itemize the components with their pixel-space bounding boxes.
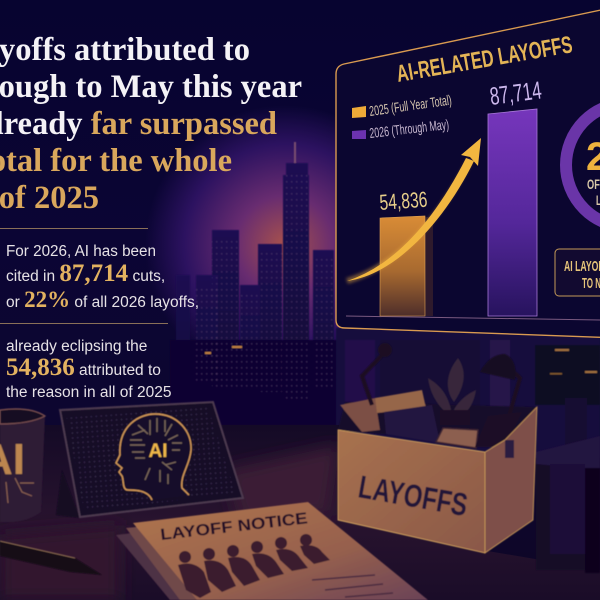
notice heading: LAYOFF NOTICE bbox=[160, 510, 309, 544]
legend label 2025: 2025 (Full Year Total) bbox=[368, 92, 453, 119]
paragraph 2025 comparison: the reason in all of 2025 bbox=[6, 384, 171, 401]
desk lamp right bbox=[505, 364, 520, 430]
layoff notice papers bbox=[116, 502, 428, 600]
growth arrow bbox=[347, 138, 481, 281]
bar value 54,836: 54,836 bbox=[379, 187, 428, 215]
headline: of 2025 bbox=[0, 180, 99, 216]
divider top bbox=[0, 228, 148, 230]
folders bbox=[340, 398, 380, 432]
monitor screen panel bbox=[336, 6, 600, 338]
legend swatch 2026 bbox=[352, 130, 366, 139]
paragraph 2025 comparison bbox=[6, 338, 171, 401]
photo frame bbox=[436, 428, 478, 448]
box side bbox=[485, 407, 537, 553]
box front bbox=[338, 430, 485, 553]
donut chart bbox=[566, 103, 600, 227]
paragraph 2025 comparison: already eclipsing the bbox=[6, 338, 147, 355]
divider middle bbox=[0, 322, 168, 324]
bar 2025 bbox=[380, 216, 433, 316]
wooden desk bbox=[0, 425, 600, 600]
mug with AI print bbox=[0, 409, 45, 522]
city skyline bbox=[170, 142, 340, 425]
callout box bbox=[555, 249, 600, 296]
tablet AI label: AI bbox=[148, 441, 168, 462]
screen frame bbox=[336, 6, 600, 338]
notice text lines bbox=[312, 575, 393, 597]
brain circuit lines bbox=[130, 418, 182, 484]
pen bbox=[0, 541, 102, 575]
silhouettes row bbox=[178, 534, 330, 598]
baseline bbox=[346, 316, 600, 320]
paragraph 2026 statistic bbox=[6, 243, 199, 312]
head outline bbox=[116, 414, 191, 500]
cardboard box of belongings bbox=[338, 343, 537, 553]
legend label 2026: 2026 (Through May) bbox=[369, 116, 450, 141]
bar 2026 bbox=[488, 109, 537, 316]
legend swatch 2025 bbox=[352, 106, 366, 118]
bar value 87,714: 87,714 bbox=[488, 76, 543, 111]
paragraph 2025 comparison: 54,836 attributed to bbox=[6, 354, 161, 381]
box tag bbox=[505, 440, 514, 458]
paragraph 2026 statistic: or 22% of all 2026 layoffs, bbox=[6, 287, 199, 312]
phone/book bbox=[475, 412, 522, 447]
legend bbox=[352, 92, 453, 141]
box back inside bbox=[338, 402, 537, 445]
paragraph 2026 statistic: cited in 87,714 cuts, bbox=[6, 260, 165, 287]
office interior below screen bbox=[336, 328, 600, 458]
paragraph 2026 statistic: For 2026, AI has been bbox=[6, 243, 156, 260]
box label: LAYOFFS bbox=[356, 468, 470, 523]
headline bbox=[0, 32, 302, 216]
sunset glow behind skyline bbox=[130, 100, 460, 390]
desk lamp left bbox=[362, 352, 385, 405]
side desk with drawers bbox=[536, 436, 600, 573]
tablet with AI head bbox=[56, 402, 243, 518]
plant bbox=[428, 358, 476, 422]
